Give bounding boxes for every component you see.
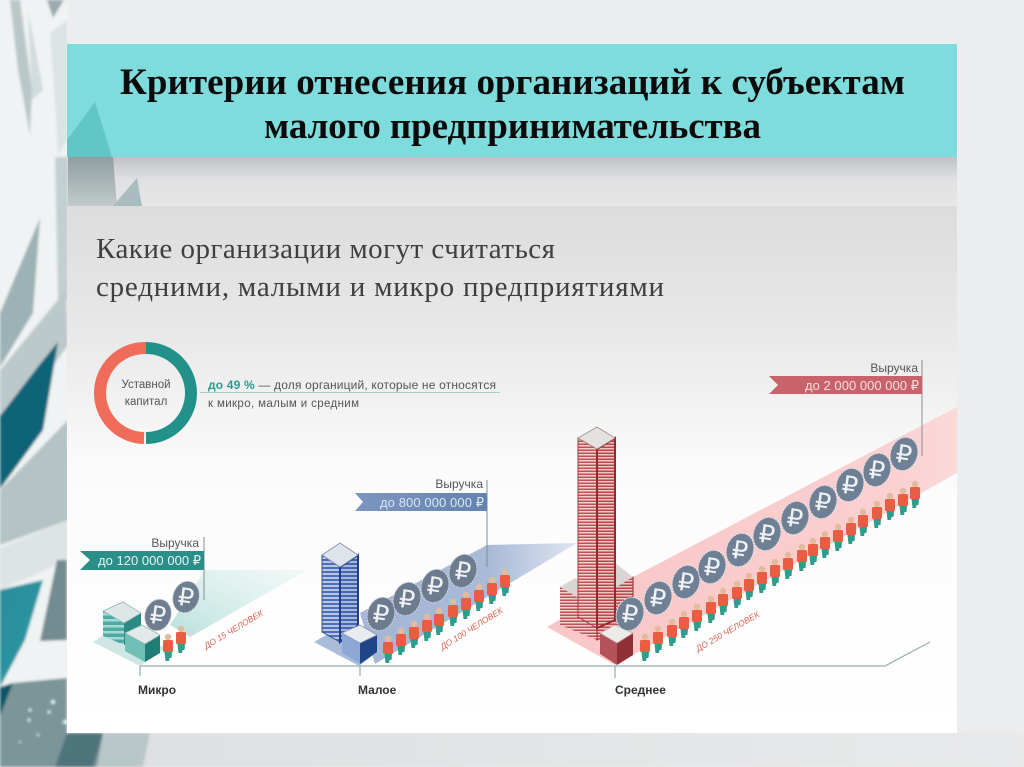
category label: micro: Микро [138, 683, 176, 697]
title: Критерии отнесения организаций к субъектам [120, 62, 905, 103]
panel heading: Какие организации могут считаться [96, 233, 555, 265]
micro coins: ₽ [148, 601, 168, 631]
medium coins: ₽ [757, 520, 777, 550]
category label: small: Малое [358, 683, 397, 697]
strip below header [68, 157, 957, 206]
medium coins: ₽ [702, 553, 722, 583]
main infographic panel [67, 206, 957, 733]
small revenue flag [355, 477, 488, 567]
micro revenue flag [80, 536, 204, 600]
micro staff [163, 626, 186, 661]
donut chart: charter capital [100, 348, 191, 438]
small building [322, 543, 377, 664]
small enterprise group [314, 477, 577, 666]
category label: medium: Среднее [615, 683, 666, 697]
small staff [383, 569, 510, 663]
micro staff label: ДО 15 ЧЕЛОВЕК [201, 607, 266, 651]
micro platform [93, 624, 165, 666]
micro enterprise group [80, 536, 307, 666]
medium coins: ₽ [730, 536, 750, 566]
micro coins: ₽ [176, 583, 196, 613]
small coins: ₽ [453, 557, 473, 587]
small coins: ₽ [397, 585, 417, 615]
panel heading: средними, малыми и микро предприятиями [96, 271, 664, 303]
medium coins: ₽ [867, 456, 887, 486]
medium revenue flag: Выручка [870, 361, 918, 375]
medium enterprise group [547, 360, 957, 665]
small coins: ₽ [425, 572, 445, 602]
donut chart: charter capital: Уставной [121, 379, 171, 391]
capital share note [200, 378, 500, 410]
medium beam [547, 407, 957, 665]
medium coins: ₽ [840, 471, 860, 501]
small staff label: ДО 100 ЧЕЛОВЕК [438, 605, 505, 652]
micro beam [170, 570, 307, 637]
small revenue flag: до 800 000 000 ₽ [380, 495, 484, 510]
medium coins: ₽ [620, 600, 640, 630]
medium coins [612, 434, 922, 634]
small platform [314, 630, 380, 666]
micro revenue flag: до 120 000 000 ₽ [98, 553, 201, 568]
small revenue flag: Выручка [435, 477, 483, 491]
medium coins: ₽ [785, 504, 805, 534]
medium staff label: ДО 250 ЧЕЛОВЕК [693, 609, 762, 654]
donut chart: charter capital: капитал [125, 396, 167, 408]
capital share note: до 49 % — доля органиций, которые не относятся [208, 378, 496, 392]
medium building [560, 427, 633, 665]
small beam [360, 543, 577, 664]
capital share note: к микро, малым и средним [208, 398, 359, 410]
small coins [363, 551, 481, 634]
micro coins [141, 578, 203, 634]
medium coins: ₽ [676, 568, 696, 598]
micro revenue flag: Выручка [151, 536, 199, 550]
medium revenue flag: до 2 000 000 000 ₽ [805, 378, 919, 393]
header banner [67, 44, 957, 157]
medium staff [640, 481, 920, 661]
medium coins: ₽ [648, 584, 668, 614]
medium revenue flag [769, 360, 922, 456]
medium coins: ₽ [894, 440, 914, 470]
axis line with category ticks [140, 642, 930, 678]
micro building [103, 602, 160, 662]
small coins: ₽ [371, 600, 391, 630]
medium coins: ₽ [813, 488, 833, 518]
title: малого предпринимательства [264, 106, 761, 147]
